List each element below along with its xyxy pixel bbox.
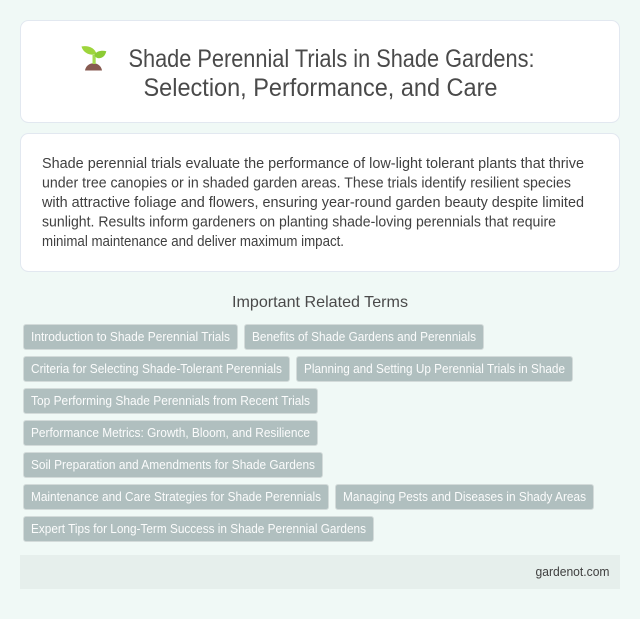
panel: title card bbox=[20, 20, 620, 122]
footer bar bbox=[20, 555, 620, 589]
description text: minimal maintenance and deliver maximum impact. bbox=[42, 234, 344, 250]
tag bbox=[244, 324, 484, 350]
description text: with attractive foliage and flowers, ensuring year-round garden beauty despite limited bbox=[41, 195, 584, 211]
tag bbox=[24, 324, 238, 350]
heading: related terms: Important Related Terms bbox=[232, 294, 408, 311]
icon: seedling bbox=[82, 46, 106, 70]
tag bbox=[24, 420, 318, 446]
title text: Selection, Performance, and Care bbox=[144, 74, 498, 102]
tag: Criteria for Selecting Shade-Tolerant Perennials bbox=[31, 361, 282, 376]
tag bbox=[24, 356, 290, 382]
tag bbox=[296, 356, 572, 382]
footer text: gardenot.com bbox=[536, 564, 610, 579]
title text: Shade Perennial Trials in Shade Gardens: bbox=[128, 45, 534, 73]
tag: Introduction to Shade Perennial Trials bbox=[31, 329, 230, 344]
tag: Managing Pests and Diseases in Shady Areas bbox=[343, 489, 586, 504]
panel: description bbox=[20, 134, 620, 272]
tag: Performance Metrics: Growth, Bloom, and Resilience bbox=[31, 425, 310, 440]
tag: Top Performing Shade Perennials from Recent Trials bbox=[31, 393, 310, 408]
tag: Planning and Setting Up Perennial Trials in Shade bbox=[304, 361, 565, 376]
tag bbox=[24, 484, 328, 510]
title text bbox=[128, 45, 534, 102]
description text: sunlight. Results inform gardeners on planting shade-loving perennials that require bbox=[42, 214, 556, 230]
description text: under tree canopies or in shaded garden areas. These trials identify resilient species bbox=[42, 176, 571, 192]
tag bbox=[336, 484, 594, 510]
tag bbox=[24, 516, 374, 542]
tag bbox=[24, 452, 322, 478]
tag: Benefits of Shade Gardens and Perennials bbox=[252, 329, 476, 344]
tag list bbox=[24, 324, 594, 542]
description text: Shade perennial trials evaluate the performance of low-light tolerant plants that thrive bbox=[42, 156, 584, 172]
tag: Expert Tips for Long-Term Success in Shade Perennial Gardens bbox=[31, 521, 366, 536]
tag bbox=[24, 388, 318, 414]
tag: Soil Preparation and Amendments for Shade Gardens bbox=[31, 457, 315, 472]
description text bbox=[41, 156, 584, 250]
tag: Maintenance and Care Strategies for Shade Perennials bbox=[31, 489, 321, 504]
